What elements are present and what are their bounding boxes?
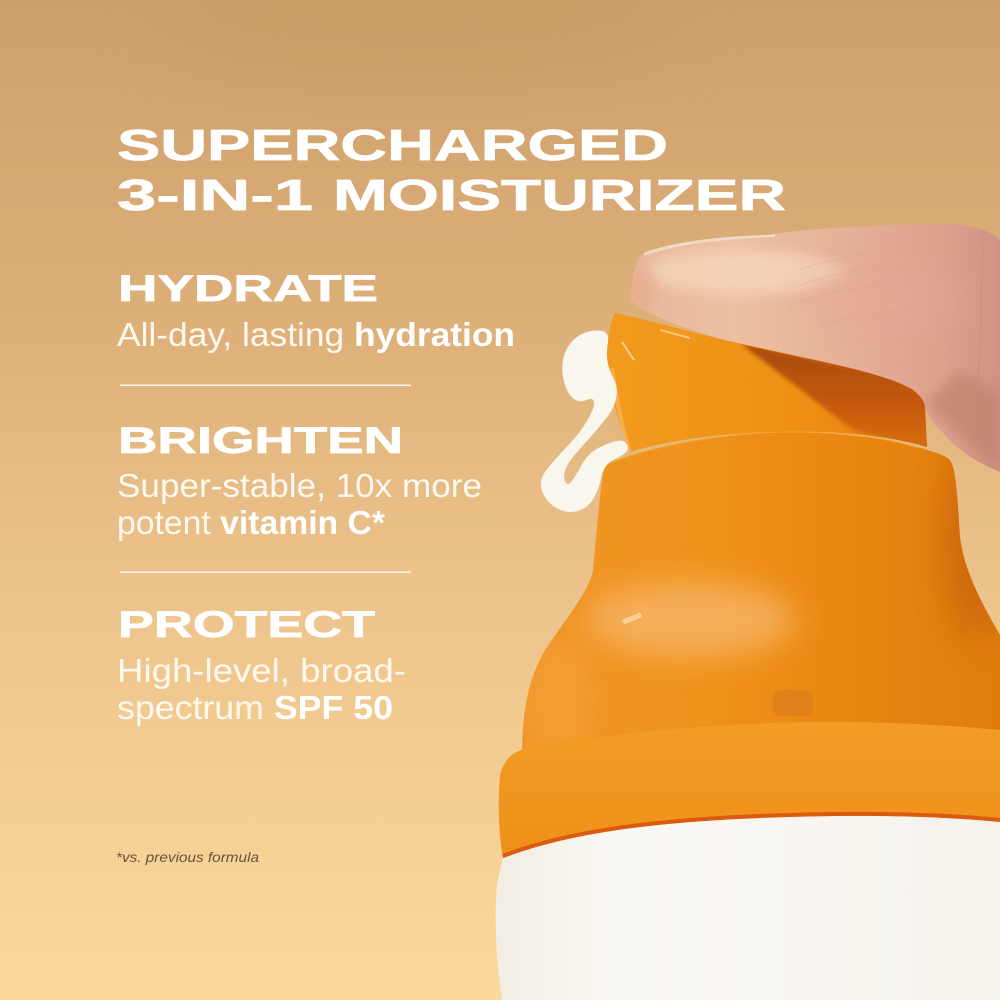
title: SUPERCHARGED bbox=[117, 121, 668, 170]
icon: pump nozzle top bbox=[607, 313, 927, 452]
benefit: protect: spectrum SPF 50 bbox=[117, 689, 393, 726]
title bbox=[117, 121, 786, 220]
title: MOISTURIZER bbox=[333, 171, 786, 220]
icon: pump cap body bbox=[522, 432, 1000, 750]
benefit: protect: High-level, broad- bbox=[117, 652, 406, 689]
icon: finger bbox=[620, 220, 1000, 480]
benefit: brighten: potent vitamin C* bbox=[117, 504, 385, 541]
benefit: hydrate: HYDRATE bbox=[118, 268, 378, 309]
product photo: hand pressing pump bottle bbox=[496, 220, 1000, 1000]
footnote: *vs. previous formula bbox=[116, 849, 259, 865]
title: 3-IN-1 bbox=[117, 171, 313, 220]
benefit: brighten: BRIGHTEN bbox=[118, 420, 403, 461]
icon: cream squeeze bbox=[541, 330, 628, 512]
benefit: protect bbox=[117, 604, 406, 726]
benefit: brighten: Super-stable, 10x more bbox=[117, 467, 482, 504]
benefit: hydrate bbox=[117, 268, 515, 353]
benefit: brighten bbox=[117, 420, 482, 541]
benefit: hydrate: All-day, lasting hydration bbox=[117, 316, 515, 353]
icon: white bottle bbox=[496, 800, 1000, 1000]
icon: collar ring bbox=[499, 722, 1000, 858]
benefit: protect: PROTECT bbox=[118, 604, 376, 645]
